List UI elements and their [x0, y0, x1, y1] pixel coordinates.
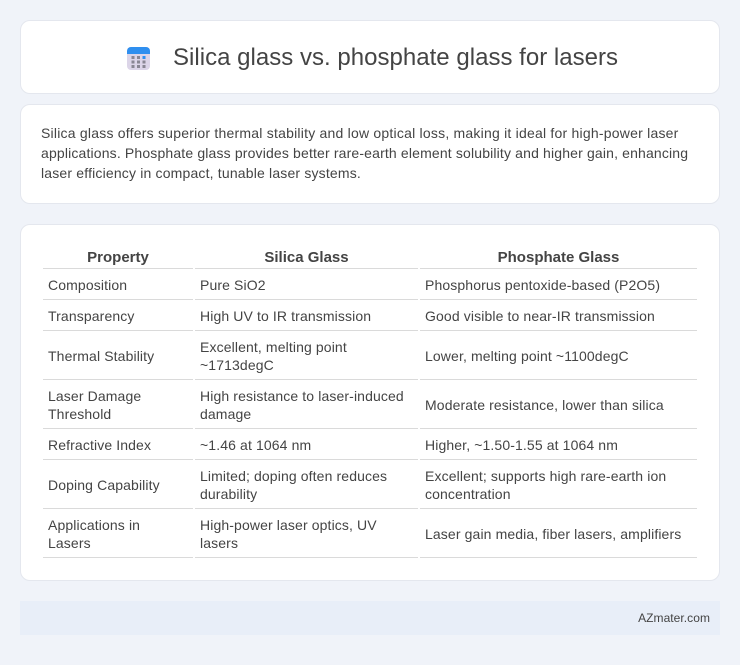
row: thermal stability [48, 339, 629, 373]
row: transparency [48, 308, 655, 324]
footer source credit: AZmater.com [638, 611, 710, 625]
comparison table panel [20, 224, 720, 581]
column header: phosphate glass: Phosphate Glass [498, 249, 619, 266]
row: refractive index [48, 437, 618, 453]
row: composition [48, 277, 660, 293]
header panel [20, 20, 720, 94]
row: thermal stability: Lower, melting point ~1100degC [425, 348, 629, 364]
summary text: applications. Phosphate glass provides better rare-earth element solubility and higher gain, enhancing [41, 145, 688, 161]
row: transparency: Good visible to near-IR transmission [425, 308, 655, 324]
row: composition: Phosphorus pentoxide-based (P2O5) [425, 277, 660, 293]
row: doping capability: Excellent; supports high rare-earth ion [425, 468, 666, 484]
row: laser damage threshold: Laser Damage [48, 388, 141, 404]
row: laser damage threshold: Moderate resistance, lower than silica [425, 397, 664, 413]
row: laser damage threshold: Threshold [48, 406, 111, 422]
row: transparency: Transparency [48, 308, 135, 324]
row: applications in lasers: Lasers [48, 535, 91, 551]
row: refractive index: Refractive Index [48, 437, 151, 453]
icon: calendar [127, 47, 150, 70]
row: doping capability: Limited; doping often reduces [200, 468, 387, 484]
title: Silica glass vs. phosphate glass for lasers [173, 44, 618, 71]
row: applications in lasers: Laser gain media, fiber lasers, amplifiers [425, 526, 681, 542]
row: thermal stability: Thermal Stability [48, 348, 154, 364]
row: laser damage threshold: High resistance to laser-induced [200, 388, 404, 404]
row: doping capability: concentration [425, 486, 511, 502]
row: doping capability [48, 468, 666, 502]
summary text: laser efficiency in compact, tunable laser systems. [41, 165, 361, 181]
row: laser damage threshold: damage [200, 406, 251, 422]
row: thermal stability: Excellent, melting point [200, 339, 347, 355]
row: composition: Pure SiO2 [200, 277, 266, 293]
row: laser damage threshold [48, 388, 664, 422]
row: doping capability: Doping Capability [48, 477, 160, 493]
summary text [41, 125, 688, 181]
row: applications in lasers: High-power laser optics, UV [200, 517, 377, 533]
row: refractive index: ~1.46 at 1064 nm [200, 437, 311, 453]
summary text: Silica glass offers superior thermal stability and low optical loss, making it ideal for high-power laser [41, 125, 679, 141]
row: applications in lasers: Applications in [48, 517, 140, 533]
row: composition: Composition [48, 277, 127, 293]
column header: silica glass: Silica Glass [264, 249, 349, 266]
summary panel [20, 104, 720, 204]
row: doping capability: durability [200, 486, 257, 502]
footer bar [20, 601, 720, 635]
row: refractive index: Higher, ~1.50-1.55 at 1064 nm [425, 437, 618, 453]
row: transparency: High UV to IR transmission [200, 308, 371, 324]
row: applications in lasers [48, 517, 681, 551]
row: applications in lasers: lasers [200, 535, 238, 551]
column header: property: Property [87, 249, 149, 266]
row: thermal stability: ~1713degC [200, 357, 274, 373]
